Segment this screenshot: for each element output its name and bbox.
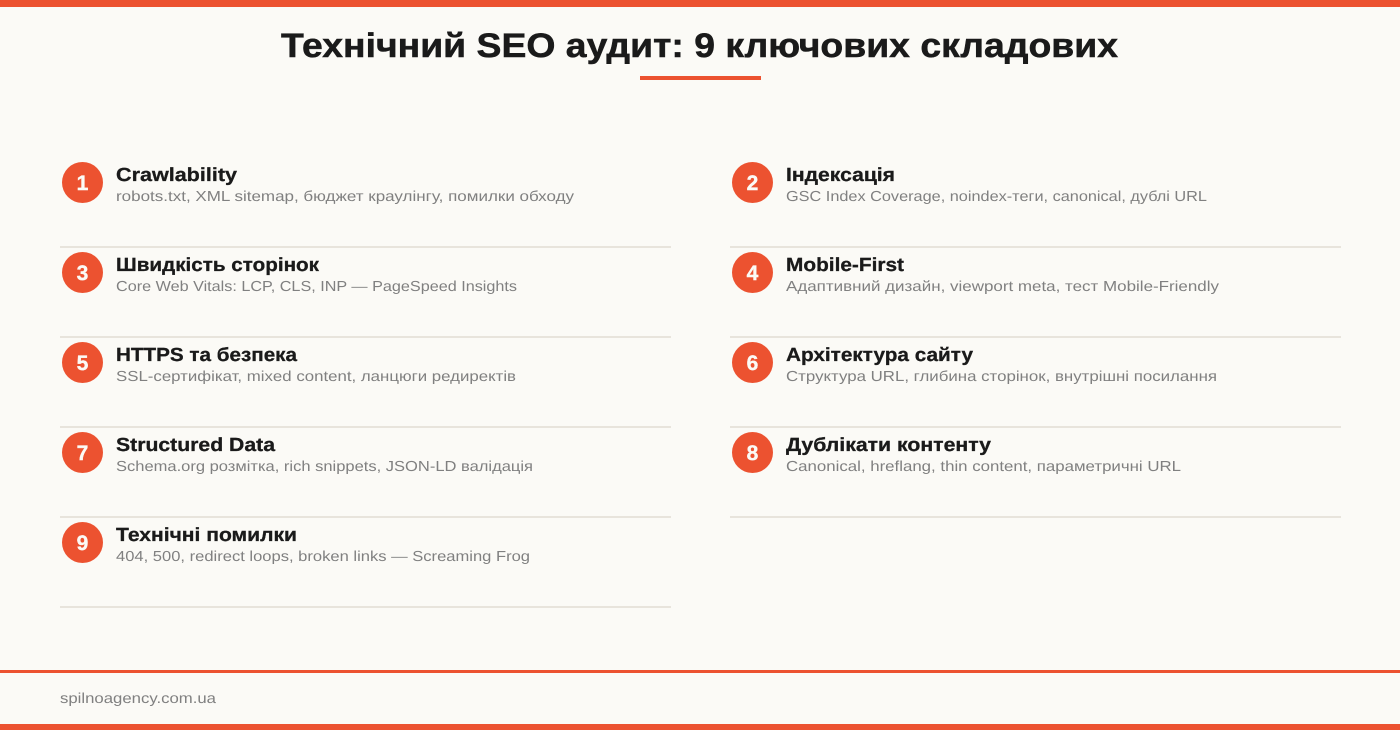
number badge 8: 8 (747, 442, 759, 465)
description 3: Core Web Vitals: LCP, CLS, INP — PageSpeed Insights (116, 279, 517, 295)
number badge 5: 5 (77, 352, 89, 375)
description 5: SSL-сертифікат, mixed content, ланцюги редиректів (116, 369, 516, 385)
number badge 7: 7 (77, 442, 88, 465)
item 8: Дублікати контенту (732, 432, 1181, 475)
heading 8: Дублікати контенту (786, 435, 991, 456)
number badge 1: 1 (77, 172, 89, 195)
item 5: HTTPS та безпека (62, 342, 516, 385)
heading 9: Технічні помилки (116, 525, 297, 546)
description 2: GSC Index Coverage, noindex-теги, canonical, дублі URL (786, 189, 1207, 205)
item 1: Crawlability (62, 162, 575, 205)
bottom accent bar (0, 724, 1400, 730)
description 9: 404, 500, redirect loops, broken links — Screaming Frog (116, 549, 530, 565)
heading 3: Швидкість сторінок (116, 255, 320, 276)
heading 6: Архітектура сайту (786, 345, 973, 366)
number badge 3: 3 (77, 262, 88, 285)
item 2: Індексація (732, 162, 1207, 205)
footer rule (0, 670, 1400, 673)
number badge 4 (732, 252, 773, 293)
item 3: Швидкість сторінок (62, 252, 517, 295)
title: Технічний SEO аудит: 9 ключових складових (281, 27, 1118, 65)
description 6: Структура URL, глибина сторінок, внутрішні посилання (786, 369, 1217, 385)
heading 5: HTTPS та безпека (116, 345, 297, 366)
number badge 4: 4 (747, 262, 759, 285)
number badge 5 (62, 342, 103, 383)
heading 7: Structured Data (116, 435, 275, 456)
top accent bar (0, 0, 1400, 7)
number badge 9 (62, 522, 103, 563)
number badge 2 (732, 162, 773, 203)
description 1: robots.txt, XML sitemap, бюджет краулінгу, помилки обходу (116, 189, 575, 205)
number badge 2: 2 (747, 172, 758, 195)
heading 1: Crawlability (116, 165, 237, 186)
number badge 6 (732, 342, 773, 383)
item 7: Structured Data (62, 432, 533, 475)
description 7: Schema.org розмітка, rich snippets, JSON-LD валідація (116, 459, 533, 475)
number badge 8 (732, 432, 773, 473)
number badge 9: 9 (77, 532, 88, 555)
item 4: Mobile-First (732, 252, 1220, 295)
number badge 1 (62, 162, 103, 203)
number badge 6: 6 (747, 352, 758, 375)
heading 4: Mobile-First (786, 255, 905, 276)
item 9: Технічні помилки (62, 522, 530, 565)
title underline (640, 76, 761, 80)
footer source text: spilnoagency.com.ua (60, 691, 217, 707)
number badge 7 (62, 432, 103, 473)
item 6: Архітектура сайту (732, 342, 1217, 385)
heading 2: Індексація (786, 165, 895, 186)
description 8: Canonical, hreflang, thin content, параметричні URL (786, 459, 1181, 475)
description 4: Адаптивний дизайн, viewport meta, тест Mobile-Friendly (786, 279, 1220, 295)
number badge 3 (62, 252, 103, 293)
